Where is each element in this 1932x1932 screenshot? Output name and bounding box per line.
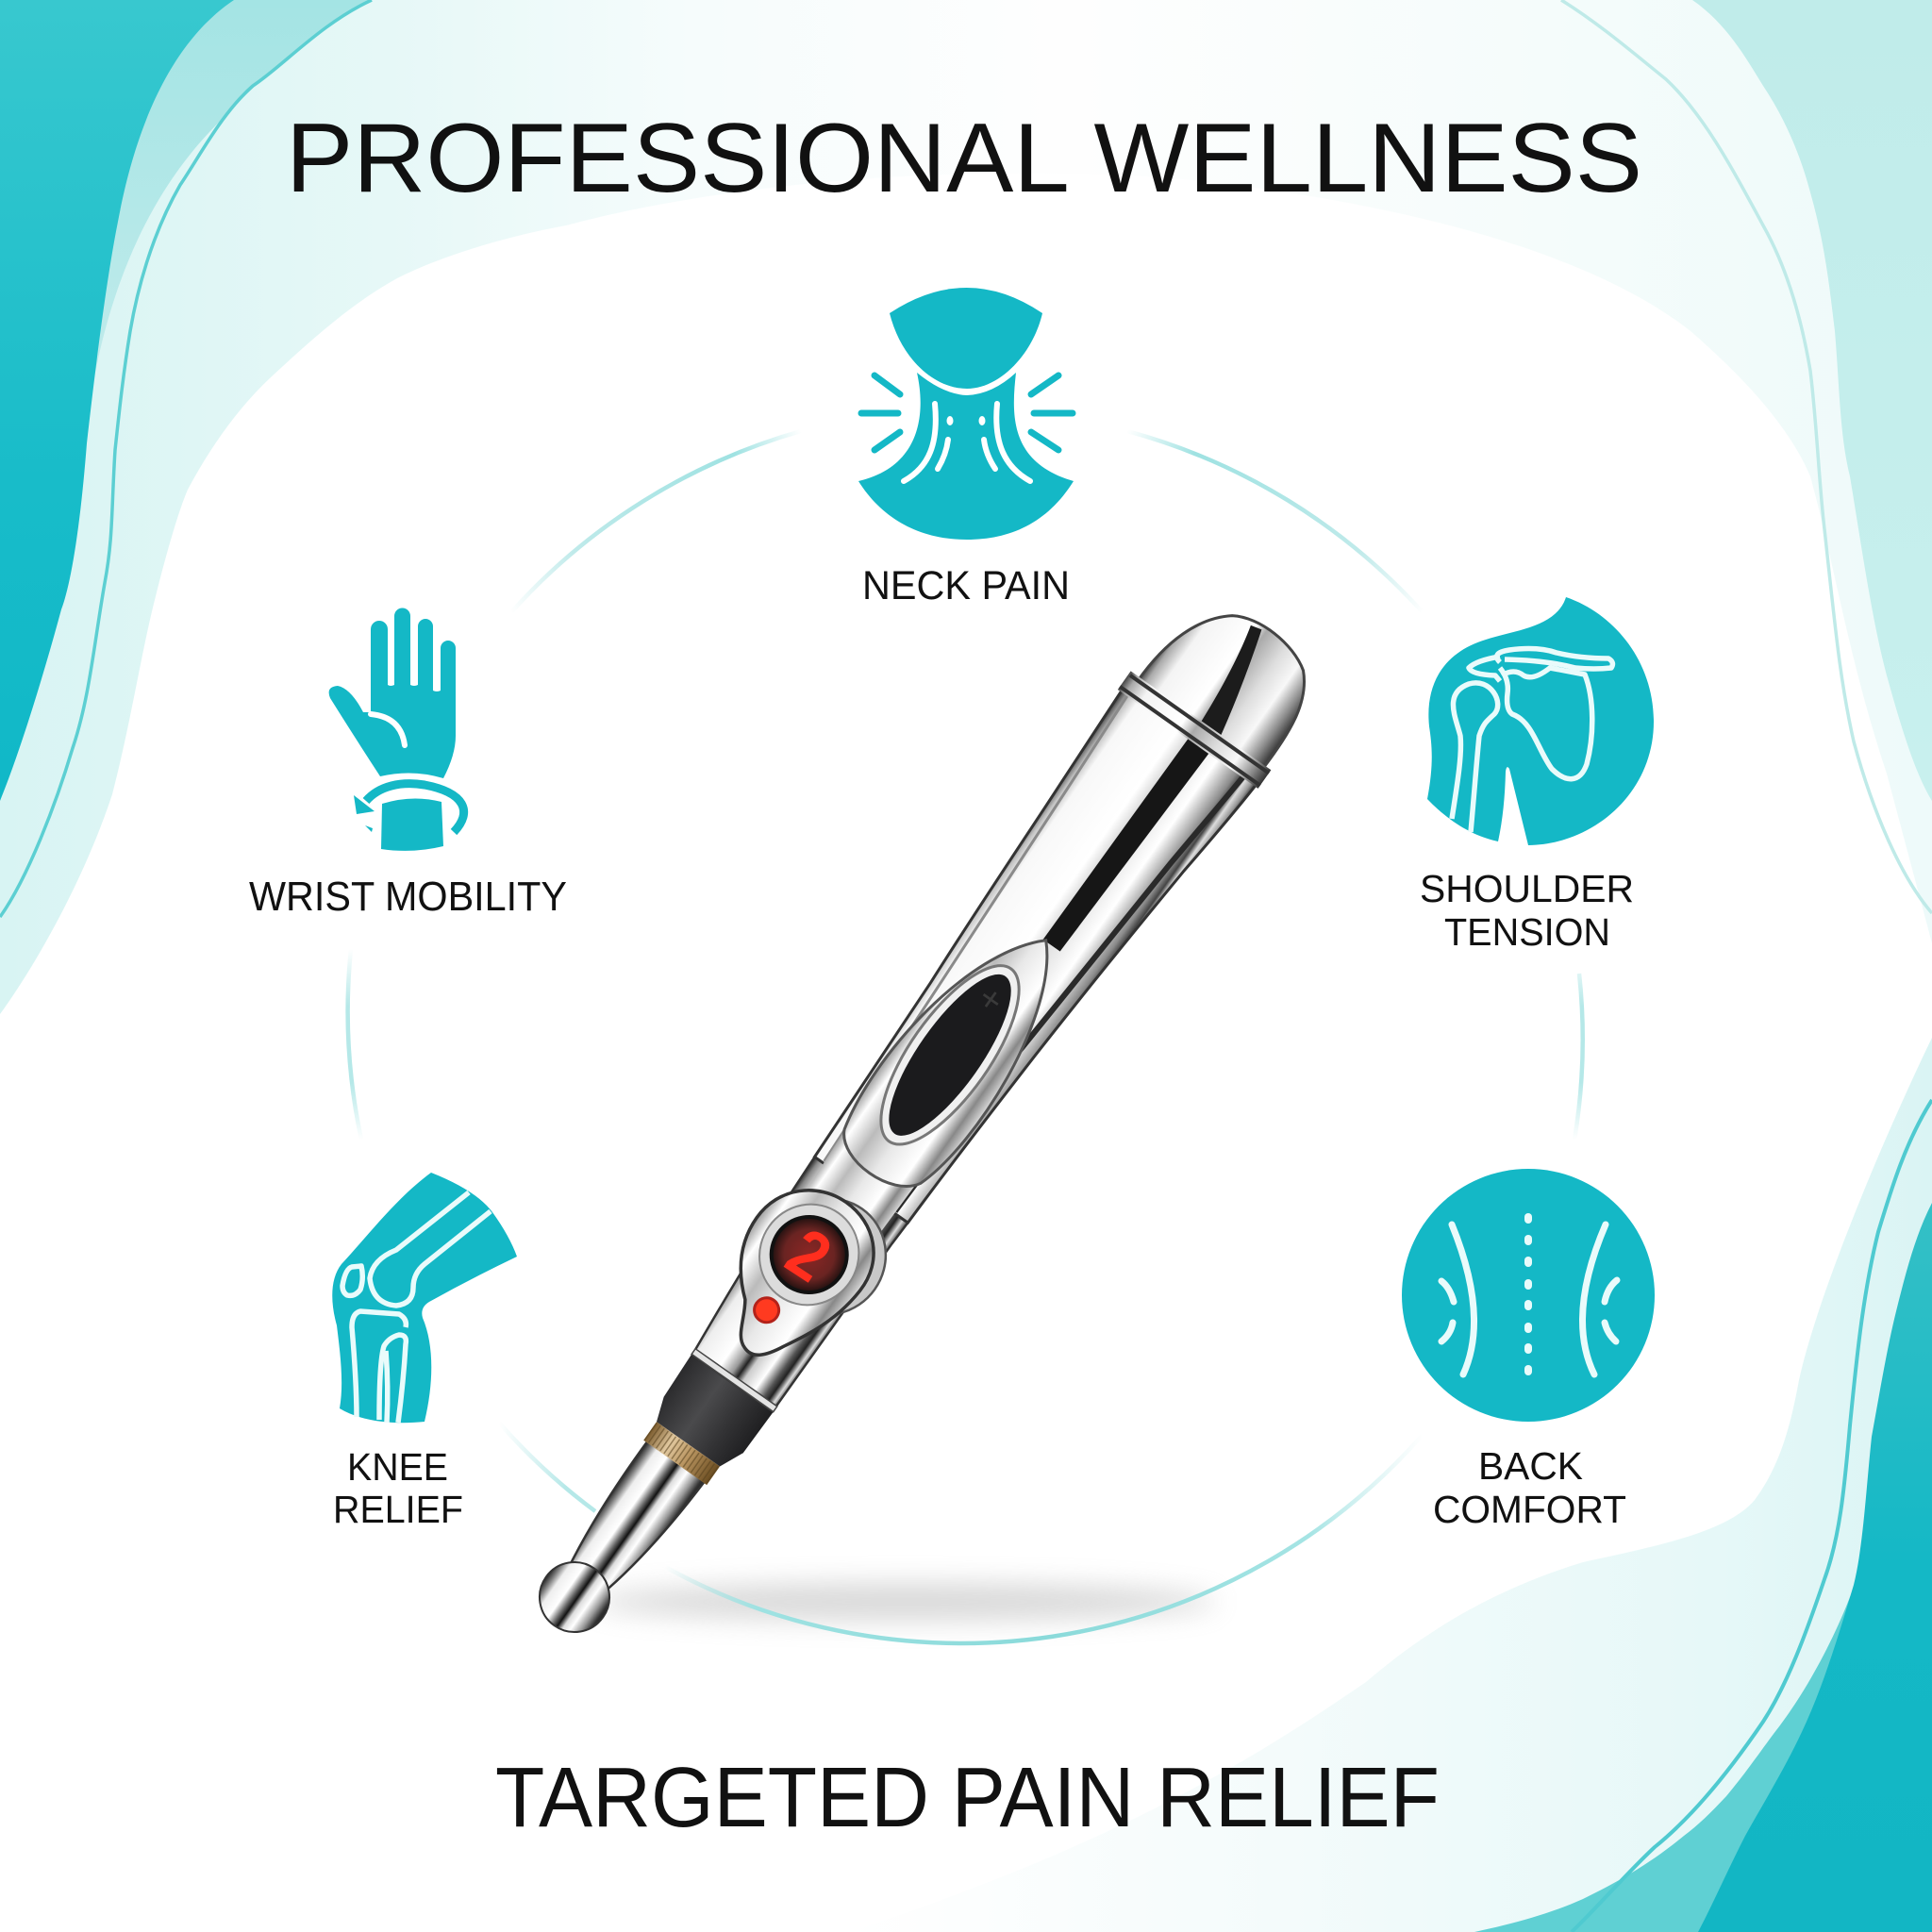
top collar rings <box>1118 671 1271 789</box>
icon group: neck pain <box>858 288 1074 608</box>
pen tip neck <box>565 1441 705 1598</box>
body bulge behind display <box>748 1176 908 1337</box>
plus mark: + <box>969 980 1013 1020</box>
label: shoulder tension: TENSION <box>1444 910 1610 954</box>
label: knee relief: RELIEF <box>333 1488 463 1531</box>
dark reflection stripe <box>1043 736 1209 956</box>
label: neck pain: NECK PAIN <box>862 563 1070 608</box>
collar ring near sleeve <box>691 1349 777 1412</box>
footer heading: targeted pain relief: TARGETED PAIN RELIEF <box>495 1751 1440 1845</box>
control button <box>857 946 1043 1164</box>
label: back comfort <box>1433 1444 1626 1531</box>
icon group: back comfort <box>1402 1169 1655 1531</box>
connecting ring arcs <box>348 431 1583 1643</box>
label: knee relief: KNEE <box>347 1445 448 1489</box>
pen tip ball <box>525 1548 624 1646</box>
icon: back with spine <box>1402 1169 1655 1422</box>
lower body <box>681 1156 909 1412</box>
title: professional wellness: PROFESSIONAL WELLNESS <box>286 104 1642 213</box>
icon group: wrist mobility <box>249 608 567 920</box>
label: shoulder tension: SHOULDER <box>1420 867 1634 910</box>
icon group: shoulder tension <box>1420 597 1654 954</box>
knurled gold ring <box>643 1422 720 1485</box>
icon: hand with rotation arrow <box>329 608 464 851</box>
LED digit: 2 <box>774 1213 844 1297</box>
acupuncture pen <box>490 578 1337 1679</box>
display frame <box>691 1165 897 1384</box>
icon: knee joint <box>332 1173 517 1423</box>
label: back comfort: BACK <box>1478 1444 1583 1488</box>
dome cap <box>1138 585 1331 769</box>
red LED display <box>754 1199 864 1310</box>
label: back comfort: COMFORT <box>1433 1488 1626 1531</box>
icon: shoulder joint <box>1427 597 1654 845</box>
left side reflection line <box>808 694 1145 1161</box>
label: shoulder tension <box>1420 867 1634 954</box>
label: wrist mobility: WRIST MOBILITY <box>249 874 567 920</box>
ground shadow under pen <box>594 1583 1217 1621</box>
black rubber sleeve <box>648 1354 774 1474</box>
main body <box>800 691 1256 1241</box>
control panel frame <box>826 904 1087 1208</box>
icon group: knee relief <box>332 1173 517 1531</box>
dome stripe <box>1187 623 1285 739</box>
right side reflection lines <box>895 757 1243 1231</box>
display bezel <box>740 1185 878 1324</box>
label: knee relief <box>333 1445 463 1531</box>
indicator light <box>750 1293 784 1327</box>
icon: neck <box>858 288 1074 540</box>
silver bridge between display and panel <box>804 1114 929 1240</box>
